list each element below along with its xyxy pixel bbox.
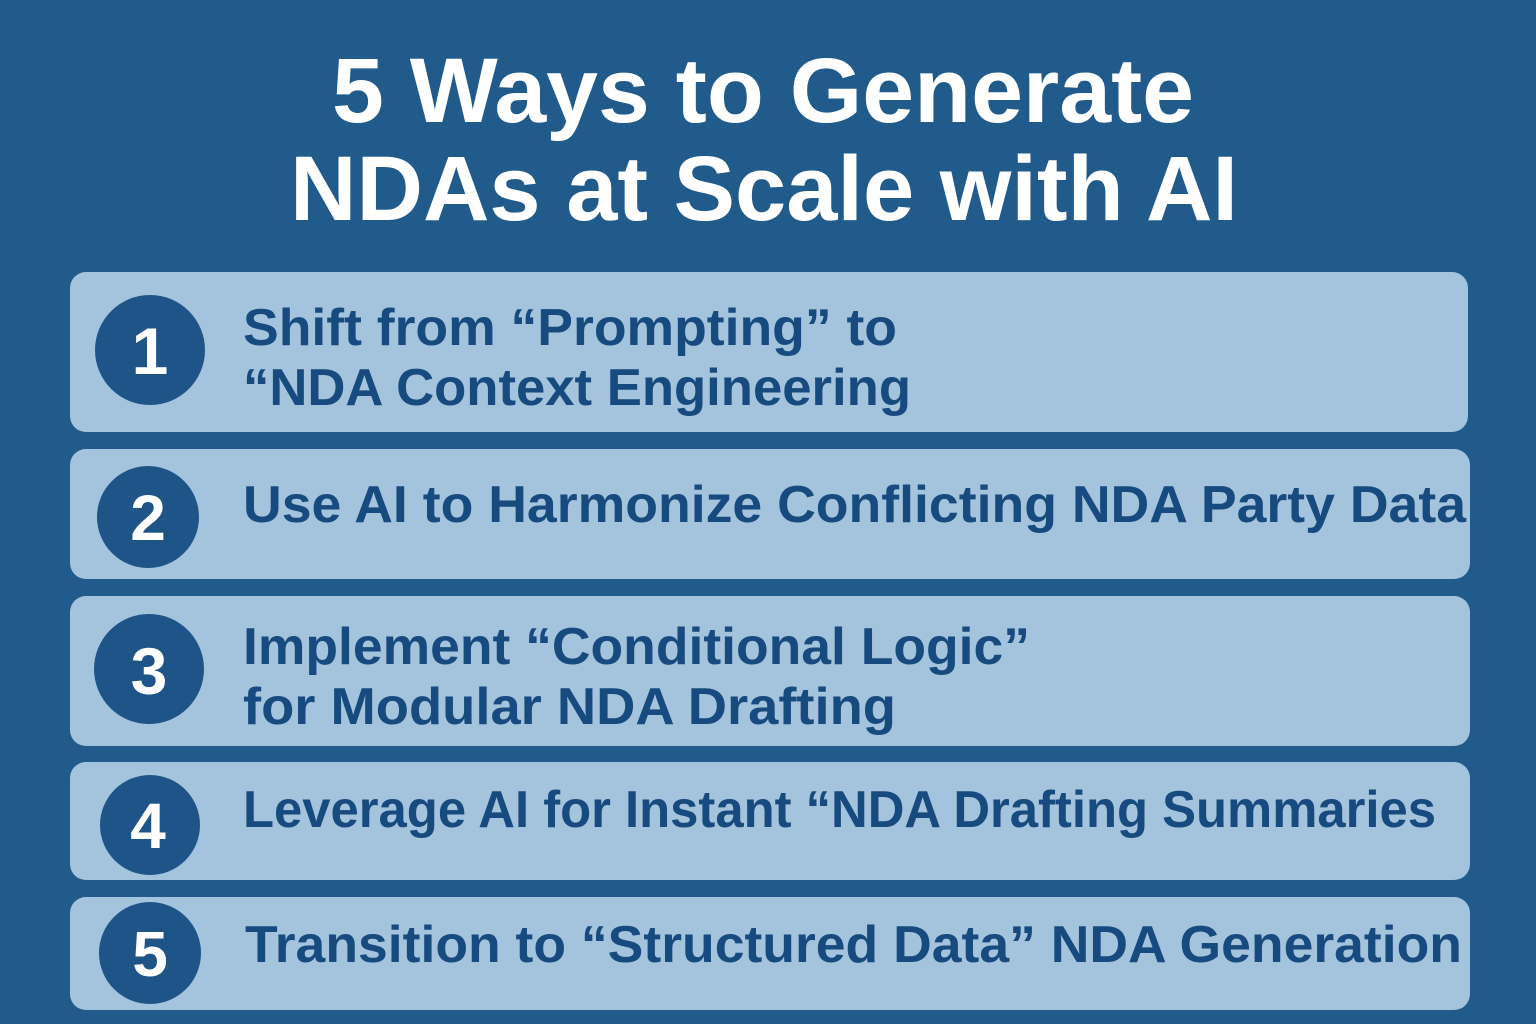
icon: number 2: 2 (130, 482, 166, 554)
icon: number 4: 4 (130, 790, 166, 862)
text block: item 3: for Modular NDA Drafting (243, 678, 896, 736)
text block: item 2: Use AI to Harmonize Conflicting NDA Party Data (243, 476, 1467, 534)
icon: number 3 (94, 614, 204, 724)
title (290, 40, 1238, 240)
icon: number 4 (100, 775, 200, 875)
icon: number 3: 3 (131, 634, 167, 708)
title: NDAs at Scale with AI (290, 138, 1238, 240)
text block: item 3: Implement “Conditional Logic” (243, 618, 1030, 676)
icon: number 5 (99, 902, 201, 1004)
panel: item 4 (70, 762, 1470, 880)
icon: number 5: 5 (132, 918, 168, 990)
panel: item 1 (70, 272, 1468, 432)
text block: item 5: Transition to “Structured Data” NDA Generation (245, 916, 1462, 974)
panel: item 5 (70, 897, 1470, 1010)
icon: number 2 (97, 466, 199, 568)
panel: item 3 (70, 596, 1470, 746)
title: 5 Ways to Generate (332, 40, 1194, 142)
text block: item 3 (243, 618, 1030, 736)
text block: item 1: Shift from “Prompting” to (243, 299, 897, 357)
panel: item 2 (70, 449, 1470, 579)
icon: number 1: 1 (132, 314, 168, 388)
text block: item 4: Leverage AI for Instant “NDA Drafting Summaries (243, 781, 1436, 839)
icon: number 1 (95, 295, 205, 405)
text block: item 1: “NDA Context Engineering (243, 359, 911, 417)
text block: item 1 (243, 299, 911, 417)
